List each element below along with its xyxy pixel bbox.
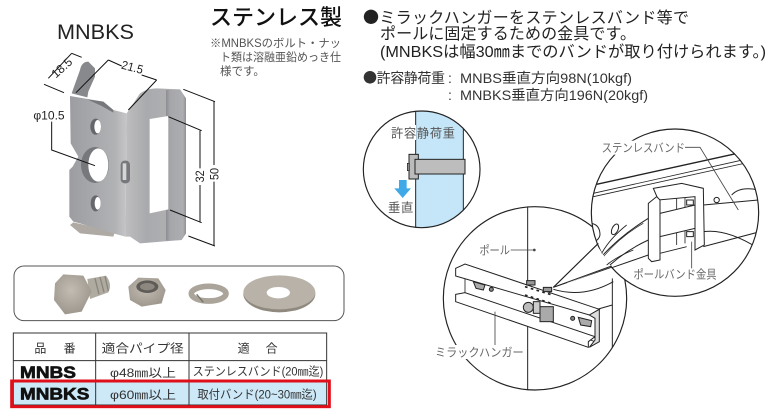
label: hanger bbox=[433, 312, 525, 360]
row MNBS: ステンレスバンド(20㎜迄) bbox=[193, 365, 323, 379]
description text: (MNBKSは幅30㎜までのバンドが取り付けられます。) bbox=[380, 43, 766, 61]
center fitting bbox=[527, 281, 552, 292]
spec table bbox=[12, 333, 329, 407]
description text: ●ミラックハンガーをステンレスバンド等で bbox=[363, 4, 689, 28]
heading: stainless: ステンレス製 bbox=[210, 5, 342, 30]
note text: 様です。 bbox=[220, 64, 265, 78]
band detail circle bbox=[591, 129, 760, 296]
bracket window bbox=[150, 116, 168, 213]
label: pole band fitting: ポールバンド金具 bbox=[633, 268, 717, 281]
bracket back plate bbox=[69, 96, 127, 237]
band middle part bbox=[660, 205, 695, 237]
callout wedge bbox=[553, 243, 613, 287]
note text bbox=[210, 37, 341, 78]
panel outline bbox=[14, 266, 344, 321]
dimension labels: φ10.5 bbox=[33, 108, 65, 122]
load specs bbox=[363, 68, 648, 103]
dimension labels: 18.5 bbox=[48, 55, 75, 81]
row highlight bbox=[13, 381, 327, 405]
row MNBKS: MNBKS bbox=[20, 385, 89, 404]
bracket photo with dimensions bbox=[33, 53, 222, 246]
diagrams bbox=[363, 110, 760, 390]
hanger end bbox=[589, 309, 599, 347]
row MNBKS: φ60㎜以上 bbox=[110, 388, 176, 402]
description text bbox=[363, 4, 766, 61]
note text: ※MNBKSのボルト・ナッ bbox=[210, 37, 341, 50]
dimension labels: 21.5 bbox=[120, 58, 145, 77]
description text: ポールに固定するための金具です。 bbox=[380, 20, 636, 44]
callout band lines bbox=[602, 225, 633, 265]
row MNBKS bbox=[20, 385, 317, 404]
bracket holes bbox=[81, 119, 130, 211]
label: pole bbox=[479, 244, 536, 257]
hanger web bbox=[465, 275, 597, 342]
clip back frame bbox=[653, 183, 704, 250]
load specs: MNBS垂直方向98N(10kgf) bbox=[460, 70, 632, 86]
header row: 品 番 bbox=[34, 341, 76, 355]
bracket fold bbox=[125, 88, 186, 243]
hanger slots bbox=[473, 282, 592, 327]
row MNBS: φ48㎜以上 bbox=[110, 366, 176, 380]
hardware panel bbox=[14, 266, 344, 321]
callout edges bbox=[553, 243, 612, 287]
bracket bottom tab bbox=[70, 222, 115, 237]
dimension labels: 32 bbox=[193, 170, 207, 182]
model name: MNBKS bbox=[57, 21, 134, 44]
load circle bbox=[363, 110, 480, 230]
band right part bbox=[703, 200, 760, 248]
label: hanger: ミラックハンガー bbox=[435, 347, 524, 360]
red highlight frame bbox=[12, 381, 329, 407]
load specs: : bbox=[448, 70, 452, 86]
label: pole: ポール bbox=[479, 244, 510, 257]
header row bbox=[34, 341, 278, 355]
pole web lines bbox=[676, 198, 686, 245]
spring washer bbox=[191, 286, 226, 302]
upper hanger lip bbox=[456, 264, 599, 315]
label: stainless band: ステンレスバンド bbox=[602, 142, 685, 155]
load specs: : bbox=[448, 87, 452, 103]
label: stainless band bbox=[600, 141, 738, 210]
dimension labels: 50 bbox=[208, 168, 222, 180]
header row: 適 合 bbox=[238, 341, 278, 355]
rear blob and bolt bbox=[610, 224, 620, 236]
header row: 適合パイプ径 bbox=[102, 341, 184, 355]
dimension labels bbox=[33, 55, 222, 182]
load specs: ●許容静荷重 bbox=[363, 68, 445, 88]
lower hanger lip bbox=[456, 293, 595, 347]
row MNBS bbox=[20, 363, 323, 382]
dimension lines bbox=[44, 53, 215, 246]
row MNBKS: 取付バンド(20~30㎜迄) bbox=[197, 387, 317, 401]
load specs: MNBKS垂直方向196N(20kgf) bbox=[460, 87, 648, 103]
bolt bbox=[54, 274, 110, 314]
arrow: vertical bbox=[394, 180, 411, 198]
bracket side strip bbox=[166, 89, 186, 241]
load labels: 許容静荷重 bbox=[391, 126, 455, 140]
hide callout seam bbox=[567, 246, 611, 283]
label: pole band fitting bbox=[632, 242, 718, 281]
bracket tab bbox=[72, 62, 95, 97]
plate top edge bbox=[87, 99, 113, 113]
note text: ト類は溶融亜鉛めっき仕 bbox=[220, 51, 341, 64]
load circle: 垂直 bbox=[388, 200, 413, 215]
flat washer bbox=[243, 275, 315, 312]
nut bbox=[128, 278, 166, 307]
clip front plate bbox=[648, 197, 660, 262]
row MNBS: MNBS bbox=[20, 363, 76, 382]
pole circle bbox=[443, 207, 627, 390]
band left part bbox=[603, 218, 648, 268]
table grid bbox=[13, 333, 327, 405]
